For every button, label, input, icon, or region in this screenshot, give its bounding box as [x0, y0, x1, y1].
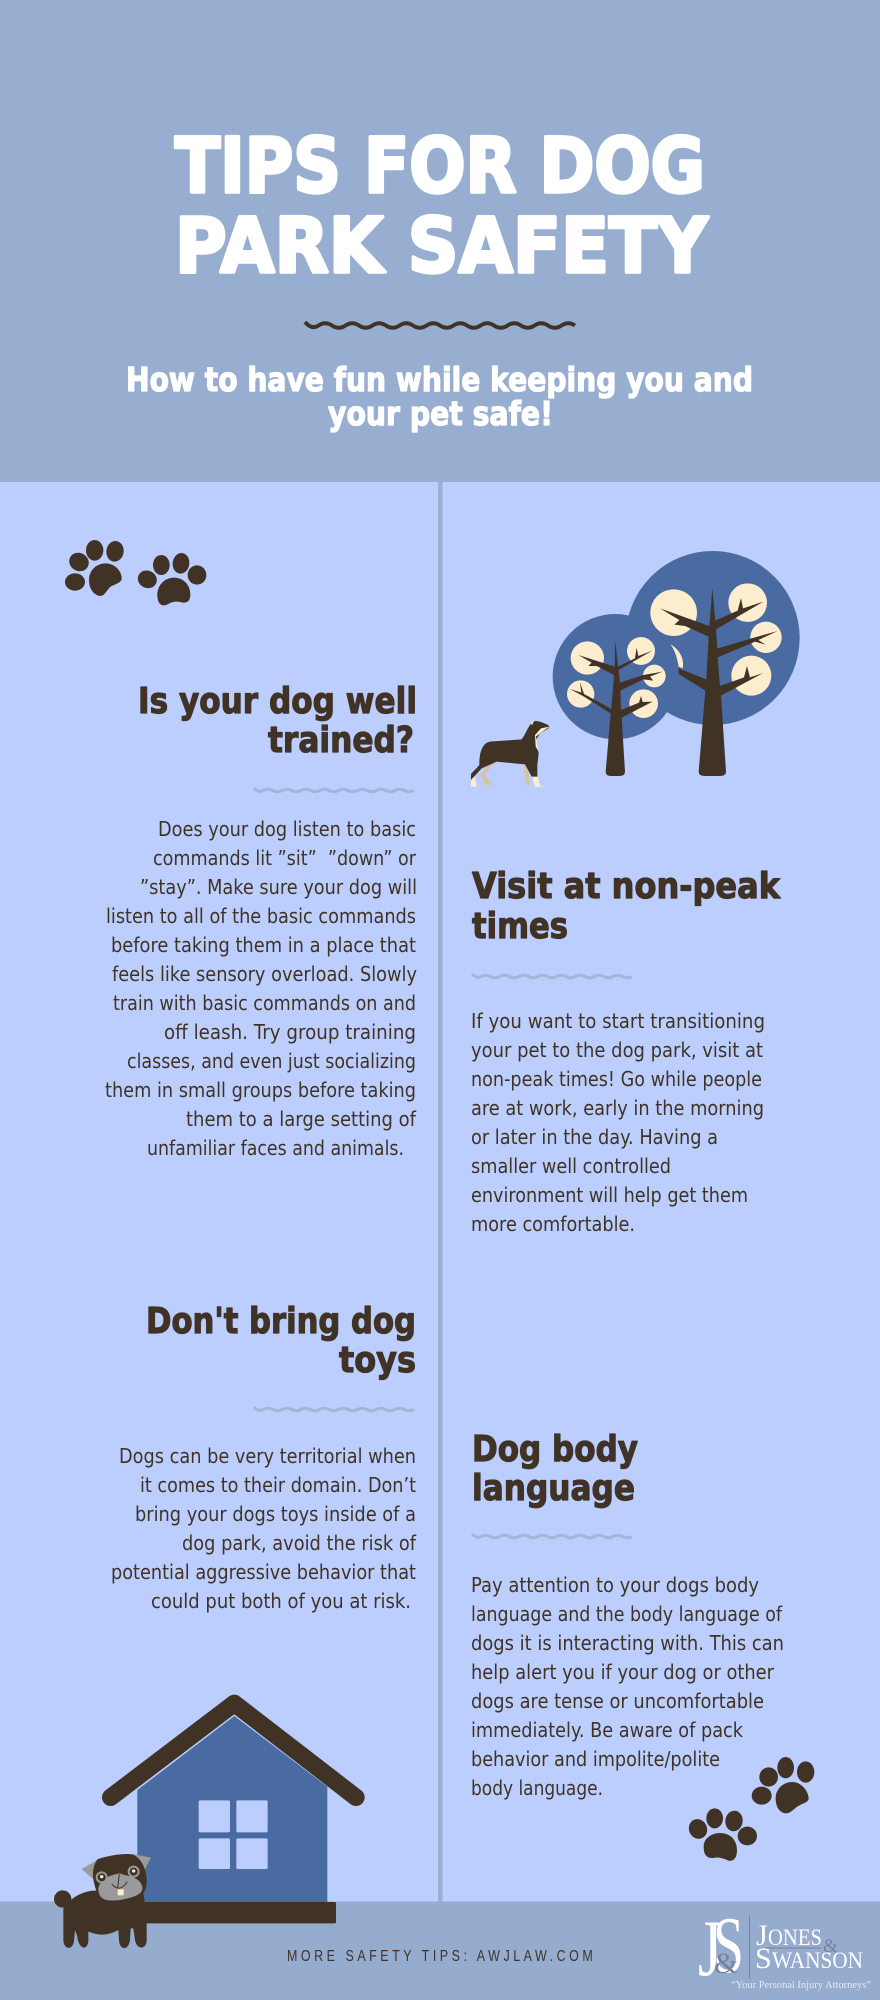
- heading: non-peak times: Visit at non-peak: [472, 866, 781, 907]
- heading: well trained: trained?: [268, 720, 414, 761]
- illustration: trees and dog: [471, 551, 800, 787]
- body text: dog toys: potential aggressive behavior that: [111, 1560, 416, 1584]
- body text: well trained: train with basic commands on and: [113, 991, 416, 1015]
- pug: [54, 1854, 151, 1948]
- wave: non-peak times: [472, 974, 632, 978]
- body text: well trained: classes, and even just socializing: [127, 1049, 416, 1073]
- logo: Jones and Swanson: “Your Personal Injury Attorneys”: [731, 1980, 871, 1991]
- logo: Jones and Swanson: WANSON: [772, 1948, 863, 1973]
- body text: dog toys: it comes to their domain. Don’t: [140, 1473, 416, 1497]
- panel: dog toys: [111, 1301, 417, 1613]
- logo: Jones and Swanson: J: [698, 1905, 722, 1993]
- heading: well trained: [138, 681, 417, 761]
- wave: dog toys: [254, 1407, 414, 1411]
- body text: non-peak times: are at work, early in the morning: [471, 1096, 764, 1120]
- panel: footer: [0, 1902, 880, 2000]
- wave: well trained: [254, 788, 414, 792]
- body text: body language: help alert you if your dog or other: [471, 1660, 775, 1684]
- logo: Jones and Swanson: S: [755, 1942, 772, 1975]
- logo: Jones and Swanson: S: [713, 1902, 744, 1990]
- body text: non-peak times: If you want to start transitioning: [471, 1009, 765, 1033]
- subtitle: How to have fun while keeping you and: [126, 360, 753, 399]
- body text: body language: language and the body language of: [471, 1602, 783, 1626]
- heading: dog toys: Don't bring dog: [146, 1301, 416, 1342]
- dog: [471, 721, 549, 787]
- body text: well trained: feels like sensory overload. Slowly: [112, 962, 417, 986]
- subtitle: [126, 360, 753, 433]
- logo: Jones and Swanson: ONES: [768, 1925, 822, 1950]
- heading: body language: [472, 1429, 638, 1509]
- title: PARK SAFETY: [175, 201, 709, 290]
- body text: well trained: them to a large setting of: [186, 1107, 417, 1131]
- heading: dog toys: [146, 1301, 416, 1381]
- body text: body language: Pay attention to your dogs body: [471, 1573, 759, 1597]
- body text: non-peak times: non-peak times! Go while people: [471, 1067, 762, 1091]
- body text: well trained: ”stay”. Make sure your dog will: [140, 875, 417, 899]
- wave: body language: [472, 1534, 632, 1538]
- panel: body language: [471, 1429, 784, 1800]
- logo: Jones and Swanson: &: [714, 1947, 738, 1980]
- body text: well trained: [105, 817, 417, 1160]
- heading: non-peak times: times: [472, 906, 568, 947]
- body text: well trained: unfamiliar faces and animals.: [147, 1136, 404, 1160]
- body text: dog toys: Dogs can be very territorial when: [119, 1444, 416, 1468]
- body text: dog toys: dog park, avoid the risk of: [182, 1531, 417, 1555]
- body text: non-peak times: smaller well controlled: [471, 1154, 671, 1178]
- logo: Jones and Swanson: J: [756, 1919, 768, 1952]
- body text: well trained: listen to all of the basic commands: [106, 904, 416, 928]
- body text: non-peak times: your pet to the dog park, visit at: [471, 1038, 763, 1062]
- body text: non-peak times: more comfortable.: [471, 1212, 635, 1236]
- icon: paw prints top left: [65, 540, 206, 605]
- body text: well trained: before taking them in a place that: [111, 933, 416, 957]
- body text: dog toys: [111, 1444, 417, 1613]
- illustration: dog house and pug: [54, 1703, 356, 1948]
- logo: Jones and Swanson: &: [823, 1936, 838, 1957]
- body text: body language: dogs are tense or uncomfortable: [471, 1689, 764, 1713]
- panel: non-peak times: [471, 866, 781, 1236]
- trees: [553, 551, 800, 776]
- body text: non-peak times: environment will help get them: [471, 1183, 748, 1207]
- body text: body language: [471, 1573, 784, 1800]
- footer link text: MORE SAFETY TIPS: AWJLAW.COM: [287, 1948, 593, 1965]
- body text: dog toys: could put both of you at risk.: [151, 1589, 411, 1613]
- body text: body language: body language.: [471, 1776, 603, 1800]
- panel: well trained: [105, 681, 417, 1160]
- panel: header: [0, 0, 880, 482]
- body text: body language: behavior and impolite/polite: [471, 1747, 720, 1771]
- title: TIPS FOR DOG: [175, 121, 705, 210]
- heading: non-peak times: [472, 866, 781, 947]
- body text: dog toys: bring your dogs toys inside of a: [135, 1502, 416, 1526]
- subtitle: your pet safe!: [328, 394, 553, 433]
- body text: well trained: off leash. Try group training: [164, 1020, 416, 1044]
- body text: body language: dogs it is interacting with. This can: [471, 1631, 784, 1655]
- body text: well trained: commands lit ”sit” ”down” or: [153, 846, 417, 870]
- body text: non-peak times: or later in the day. Having a: [471, 1125, 718, 1149]
- heading: dog toys: toys: [339, 1340, 416, 1381]
- body text: non-peak times: [471, 1009, 765, 1236]
- body text: well trained: Does your dog listen to basic: [158, 817, 416, 841]
- body text: well trained: them in small groups before taking: [105, 1078, 416, 1102]
- logo: Jones and Swanson: [698, 1902, 871, 1993]
- heading: body language: language: [472, 1468, 635, 1509]
- header wave divider: [305, 322, 575, 328]
- title: [175, 121, 709, 290]
- heading: body language: Dog body: [472, 1429, 638, 1470]
- dog house: [111, 1703, 356, 1923]
- icon: paw prints bottom right: [686, 1757, 814, 1861]
- body text: body language: immediately. Be aware of pack: [471, 1718, 743, 1742]
- heading: well trained: Is your dog well: [138, 681, 417, 722]
